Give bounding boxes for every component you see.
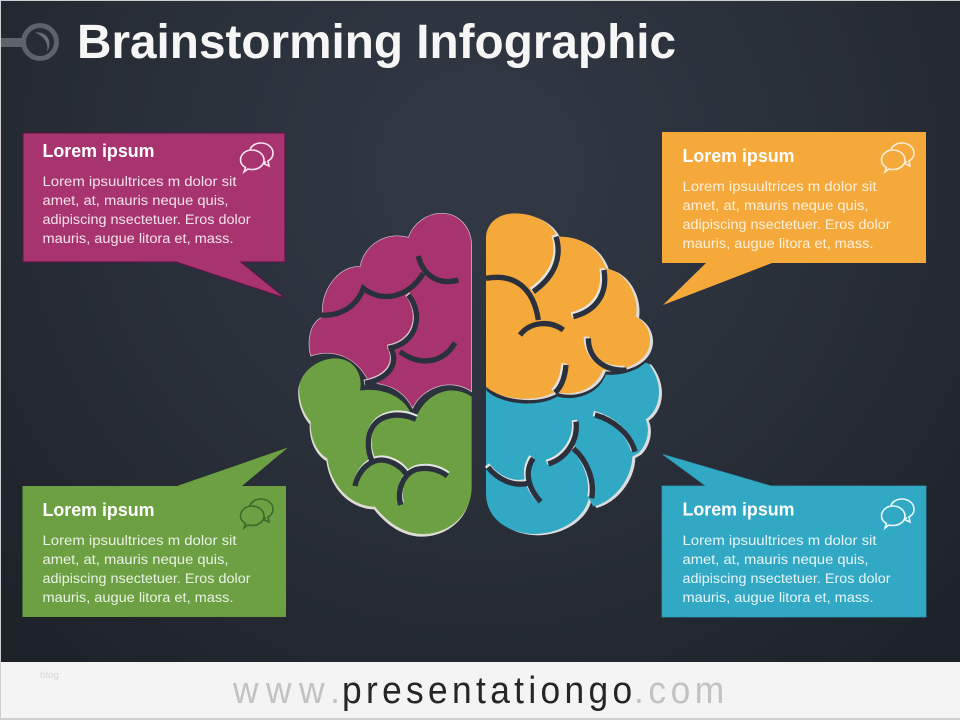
body text: teal callout: adipiscing nsectetuer. Eros dolor [682, 571, 891, 586]
logo icon: ring [1, 26, 56, 58]
panel: orange callout [662, 132, 926, 305]
footer url: .com [634, 669, 724, 711]
heading: orange callout: Lorem ipsum [682, 146, 794, 166]
body text: orange callout: Lorem ipsuultrices m dolor sit [682, 179, 877, 194]
body text: teal callout: amet, at, mauris neque quis, [682, 552, 868, 567]
body text: magenta callout: mauris, augue litora et, mass. [42, 231, 234, 246]
brain: magenta lobe [309, 213, 472, 408]
body text: orange callout [682, 179, 891, 251]
heading: teal callout: Lorem ipsum [682, 500, 794, 520]
body text: green callout: Lorem ipsuultrices m dolor sit [42, 533, 237, 548]
body text: teal callout [682, 533, 891, 605]
body text: orange callout: mauris, augue litora et, mass. [682, 236, 874, 251]
icon: chat bubbles [240, 499, 273, 528]
heading: green callout: Lorem ipsum [42, 500, 154, 520]
body text: teal callout: Lorem ipsuultrices m dolor sit [682, 533, 877, 548]
body text: magenta callout: Lorem ipsuultrices m dolor sit [42, 174, 237, 189]
icon: chat bubbles [240, 143, 273, 172]
panel: green callout [22, 448, 288, 617]
body text: magenta callout: amet, at, mauris neque quis, [42, 193, 228, 208]
body text: teal callout: mauris, augue litora et, mass. [682, 590, 874, 605]
panel: magenta callout [23, 133, 285, 298]
footer small label: blog [40, 670, 59, 680]
body text: green callout: adipiscing nsectetuer. Eros dolor [42, 571, 251, 586]
brain: green lobe [298, 358, 472, 537]
body text: magenta callout [42, 174, 251, 246]
footer url: presentationgo [342, 669, 632, 711]
icon: chat bubbles [882, 499, 914, 528]
heading: magenta callout: Lorem ipsum [42, 141, 154, 161]
brain illustration [298, 213, 662, 537]
body text: green callout: amet, at, mauris neque quis, [42, 552, 228, 567]
title: Brainstorming Infographic [77, 16, 676, 69]
body text: orange callout: amet, at, mauris neque quis, [682, 198, 868, 213]
brain: orange lobe [486, 213, 653, 402]
icon: chat bubbles [882, 143, 914, 172]
panel: teal callout [662, 454, 926, 617]
footer url [232, 669, 724, 711]
body text: magenta callout: adipiscing nsectetuer. Eros dolor [42, 212, 251, 227]
body text: green callout: mauris, augue litora et, mass. [42, 590, 234, 605]
footer url: www. [232, 669, 340, 711]
brain: teal lobe [486, 350, 662, 535]
footer band [1, 662, 960, 718]
body text: green callout [42, 533, 251, 605]
body text: orange callout: adipiscing nsectetuer. Eros dolor [682, 217, 891, 232]
